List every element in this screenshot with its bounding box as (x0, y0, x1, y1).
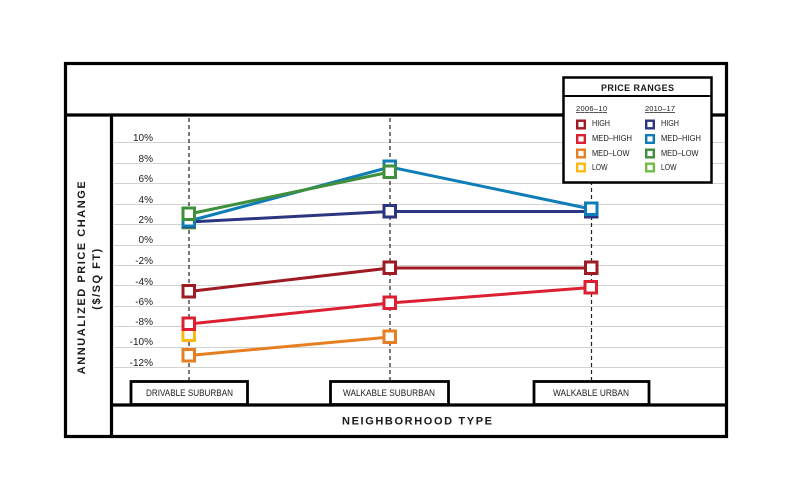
y axis tick labels: -4% (135, 277, 153, 288)
y axis tick labels: 0% (139, 235, 153, 246)
series: low 2006-10 (183, 329, 194, 340)
legend column: 2010-17: LOW (661, 163, 677, 172)
x axis title: NEIGHBORHOOD TYPE (342, 416, 492, 428)
y axis tick labels: 10% (133, 133, 153, 144)
y axis tick labels (130, 133, 153, 369)
legend column: 2006-10: MED–HIGH (592, 134, 632, 143)
series: low 2010-17 (183, 218, 194, 228)
legend column: 2010-17 (645, 104, 701, 172)
y axis tick labels: -10% (130, 337, 153, 348)
series: med-low 2010-17 (183, 166, 396, 220)
legend column: 2010-17: HIGH (661, 119, 679, 128)
y axis tick labels: -8% (135, 317, 153, 328)
series: med-high 2006-10 (183, 282, 596, 330)
legend column: 2010-17: MED–LOW (661, 149, 699, 158)
y axis tick labels: 8% (139, 154, 153, 165)
legend column: 2006-10: MED–LOW (592, 149, 630, 158)
y axis tick labels: -6% (135, 297, 153, 308)
legend column: 2006-10 (576, 104, 632, 172)
category label: walkable urban: WALKABLE URBAN (553, 388, 629, 398)
series: high 2006-10 (183, 262, 597, 297)
y axis title: ANNUALIZED PRICE CHANGE (76, 180, 88, 374)
category label: walkable suburban: WALKABLE SUBURBAN (343, 388, 435, 398)
y axis tick labels: 4% (139, 195, 153, 206)
series: med-low 2006-10 (183, 331, 396, 361)
category label: walkable suburban (330, 382, 448, 404)
legend column: 2006-10: HIGH (592, 119, 610, 128)
y axis tick labels: -2% (135, 256, 153, 267)
legend: price ranges (563, 78, 712, 182)
outer frame (65, 64, 727, 437)
category label: walkable urban (534, 382, 649, 404)
legend title: PRICE RANGES (601, 83, 674, 93)
y axis tick labels: -12% (130, 358, 153, 369)
y axis tick labels: 2% (139, 215, 153, 226)
category label: drivable suburban: DRIVABLE SUBURBAN (146, 388, 233, 398)
legend column: 2006-10: LOW (592, 163, 608, 172)
y axis title (76, 180, 103, 374)
legend column: 2006-10: 2006–10 (576, 104, 607, 113)
y axis title: ($/SQ FT) (91, 247, 103, 310)
series: med-high 2010-17 (183, 161, 597, 226)
series: high 2010-17 (183, 206, 597, 227)
legend column: 2010-17: MED–HIGH (661, 134, 701, 143)
category label: drivable suburban (131, 382, 248, 404)
y axis tick labels: 6% (139, 174, 153, 185)
legend column: 2010-17: 2010–17 (645, 104, 675, 113)
